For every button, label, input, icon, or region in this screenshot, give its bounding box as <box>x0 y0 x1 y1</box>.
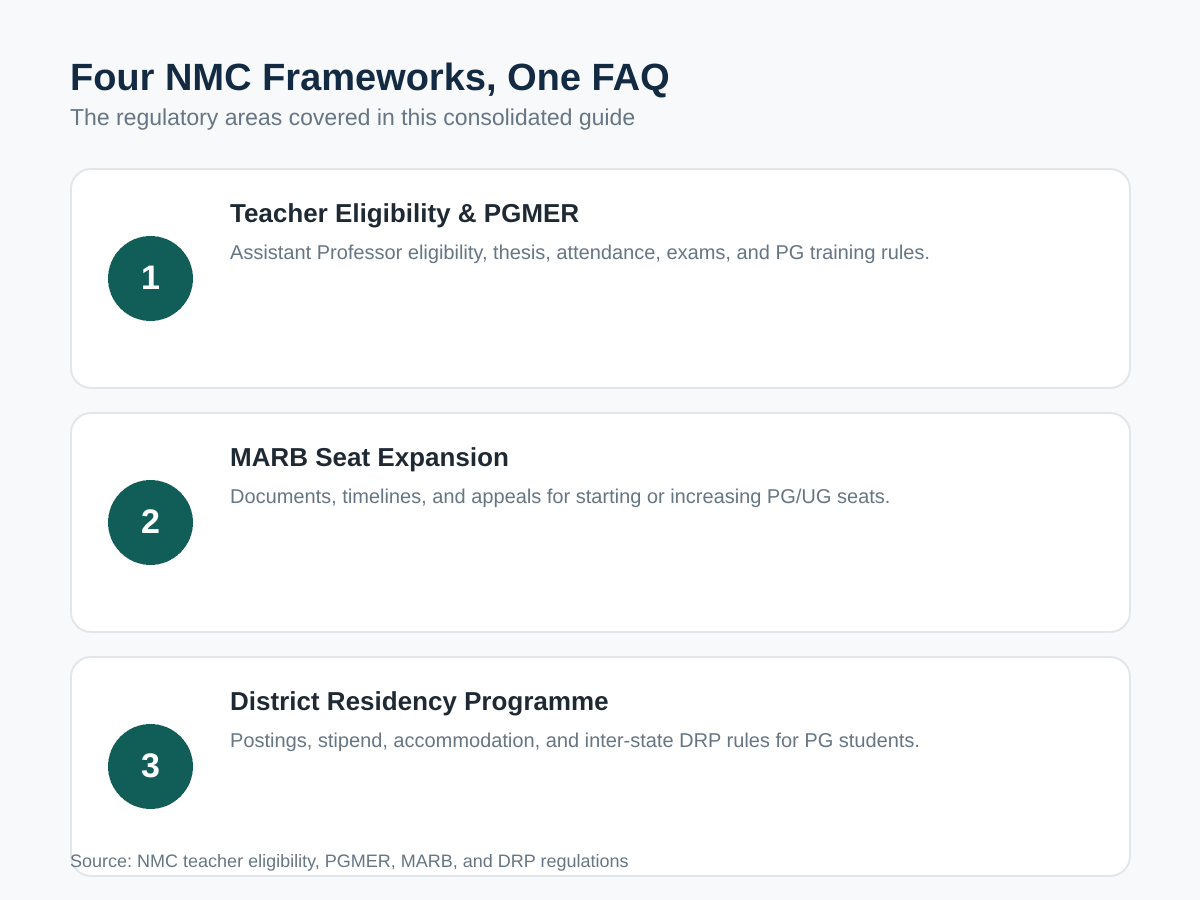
subtitle: The regulatory areas covered in this consolidated guide <box>70 104 635 130</box>
icon: number 2 <box>108 480 193 565</box>
description: MARB Seat Expansion: Documents, timelines, and appeals for starting or increasing PG/UG seats. <box>230 486 890 508</box>
icon: number 1 <box>108 236 193 321</box>
description: District Residency Programme: Postings, stipend, accommodation, and inter-state DRP rules for PG students. <box>230 730 920 752</box>
panel: District Residency Programme <box>71 657 1130 876</box>
panel: Teacher Eligibility & PGMER <box>71 169 1130 388</box>
source note: Source: NMC teacher eligibility, PGMER, MARB, and DRP regulations <box>70 851 629 871</box>
description: Teacher Eligibility & PGMER: Assistant Professor eligibility, thesis, attendance, exams, and PG training rules. <box>230 242 930 264</box>
icon: number 3 <box>108 724 193 809</box>
heading: Teacher Eligibility & PGMER: Teacher Eligibility & PGMER <box>230 198 579 228</box>
icon: number 3: 3 <box>141 747 160 785</box>
icon: number 2: 2 <box>141 503 160 541</box>
icon: number 1: 1 <box>141 259 160 297</box>
title: Four NMC Frameworks, One FAQ <box>70 57 670 99</box>
panel: MARB Seat Expansion <box>71 413 1130 632</box>
heading: District Residency Programme: District Residency Programme <box>230 686 609 716</box>
heading: MARB Seat Expansion: MARB Seat Expansion <box>230 442 509 472</box>
